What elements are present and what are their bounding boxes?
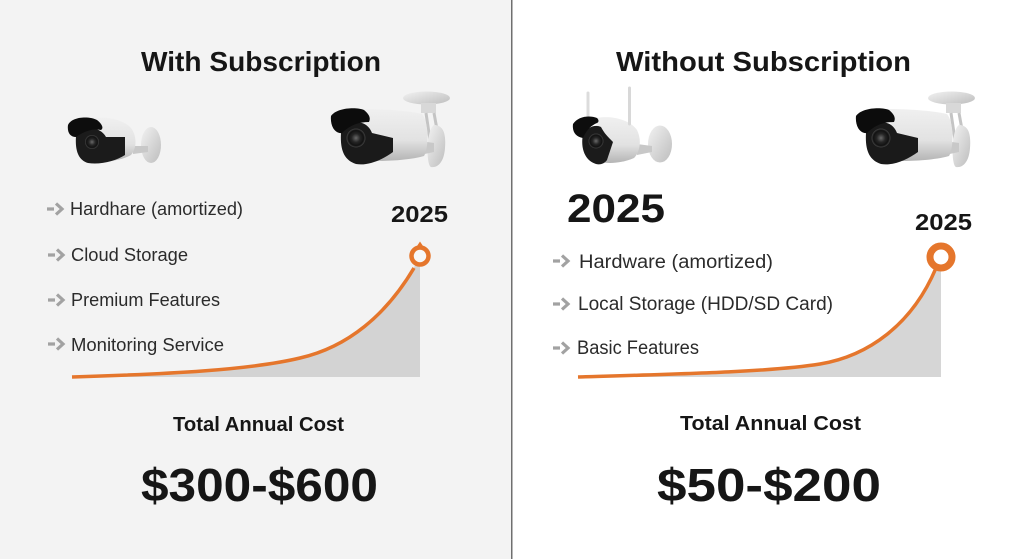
label: total annual cost: Total Annual Cost (173, 414, 344, 436)
heading: with subscription: With Subscription (141, 46, 381, 77)
list item: hardware: Hardhare (amortized) (70, 199, 243, 219)
chart: rising cost curve without subscription (578, 209, 972, 377)
list: without subscription cost items (553, 252, 833, 359)
icon: small bullet camera (68, 117, 161, 164)
chart: rising cost curve with subscription (72, 201, 448, 377)
list item: basic features: Basic Features (577, 338, 699, 359)
panel: with subscription (0, 0, 511, 559)
list item: monitoring service: Monitoring Service (71, 335, 224, 355)
icon: large bullet camera with ceiling mount (331, 92, 450, 167)
list: with subscription cost items (47, 199, 243, 355)
chart: rising cost curve with subscription: 2025 (391, 201, 448, 227)
year label: large 2025: 2025 (567, 187, 665, 231)
chart: rising cost curve without subscription: 2025 (915, 209, 972, 235)
icon: wifi camera with antennas (573, 88, 672, 164)
panel: without subscription (512, 0, 1024, 559)
divider (511, 0, 512, 559)
list item: local storage: Local Storage (HDD/SD Card) (578, 294, 833, 315)
icon: large bullet camera with ceiling mount (856, 92, 975, 167)
list item: cloud storage: Cloud Storage (71, 245, 188, 265)
price: with subscription: $300-$600 (141, 459, 378, 511)
label: total annual cost: Total Annual Cost (680, 413, 861, 435)
list item: premium features: Premium Features (71, 290, 220, 310)
heading: without subscription: Without Subscription (616, 46, 911, 77)
list item: hardware: Hardware (amortized) (579, 252, 773, 273)
price: without subscription: $50-$200 (657, 459, 881, 511)
